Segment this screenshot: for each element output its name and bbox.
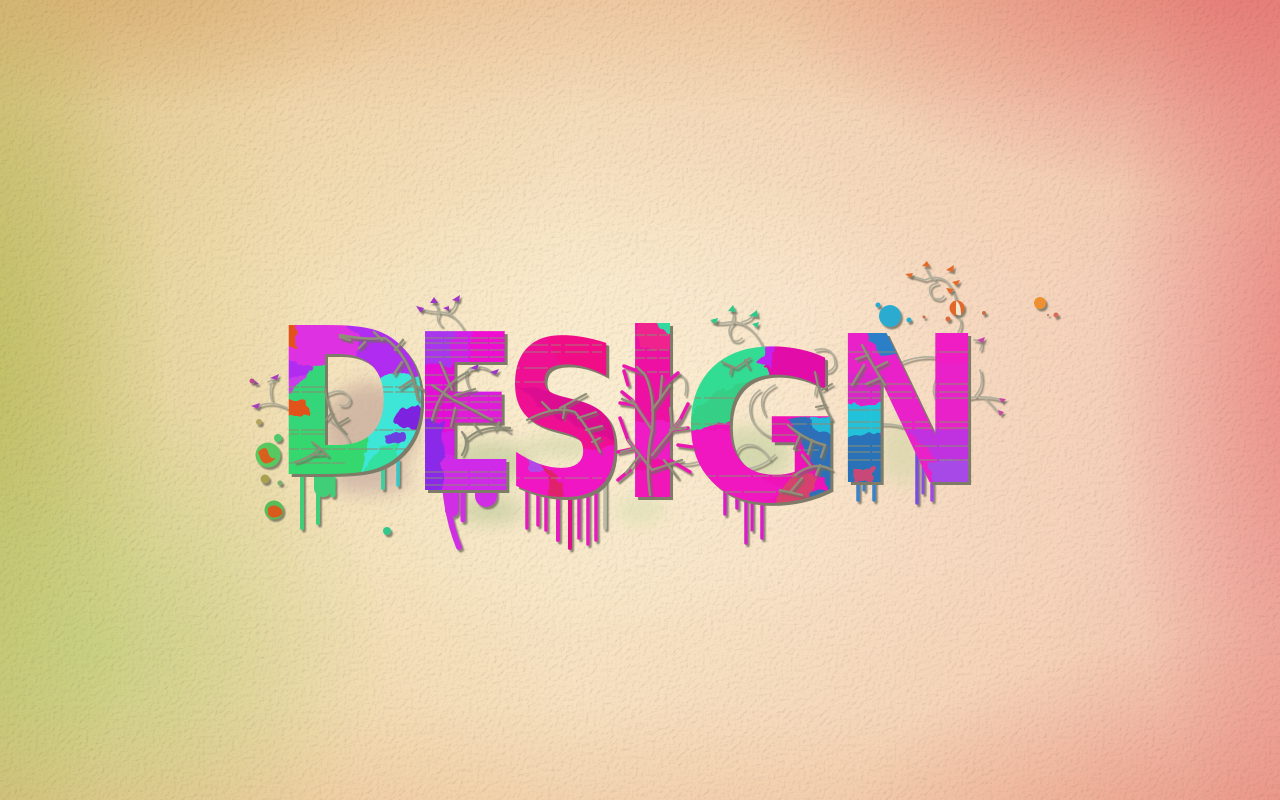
vine: above E [418,300,465,332]
letter E [425,331,510,493]
letter D [288,325,424,477]
branch: coral pink layer around I [618,366,692,480]
drips: letter G [725,490,762,543]
branch: top of D [340,332,424,400]
small dots: left [250,378,391,535]
vine: top right of N [908,268,961,333]
letter E: E [414,291,521,545]
foreground branches across letters [295,332,887,495]
branch: across E [432,362,510,455]
drips: letter E [445,486,486,547]
letter D: D [274,287,434,525]
drips: letter N [858,450,932,503]
dot: orange cluster [946,300,986,322]
dot: large blue [876,302,926,327]
artwork: DESIGN lettering [250,261,1062,554]
letter N [848,333,972,485]
paint washes behind letters [322,382,931,524]
dot: orange right [1034,297,1058,318]
letter S [515,335,618,500]
vine: left of D [258,380,350,445]
paint drips [302,450,932,548]
letter G: G [684,312,848,553]
dot: large green and orange [256,442,280,468]
drips: letter S [527,480,605,548]
background vines [258,268,1002,470]
letter I [635,323,674,500]
dot: lower left green and orange [264,500,284,520]
branch: top of G [722,358,832,420]
branch: across S [527,394,602,452]
vine: between I and G [665,374,712,464]
vine: between E and S [466,367,510,432]
decorative paint dots [250,297,1058,535]
vine: N right and swirls [870,340,1002,440]
branch: G lower right [780,425,832,495]
vine leaves [251,261,1006,416]
branch: coral tree over I [621,367,686,495]
letter N: N [834,295,988,533]
letter I: I [621,279,690,557]
letter G [690,346,834,506]
drips: letter D [302,460,398,528]
branch: top left of N [852,345,887,385]
letter S: S [506,298,630,548]
branch: lower left of D [295,390,348,462]
vine: above G [712,311,763,347]
vine: inside G [735,349,835,470]
